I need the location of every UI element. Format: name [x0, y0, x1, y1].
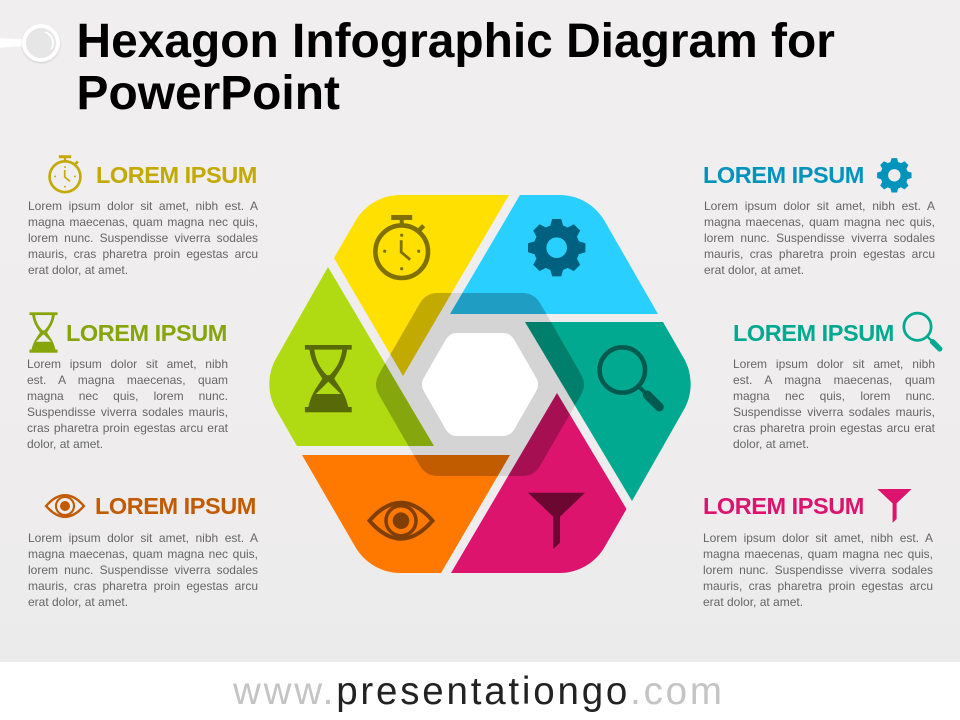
body text: erat dolor, at amet. [704, 263, 804, 277]
heading: LOREM IPSUM [95, 493, 256, 519]
body text: Lorem ipsum dolor sit amet, nibh [27, 357, 228, 371]
body text: dolor, at amet. [733, 437, 809, 451]
centre ring [376, 293, 584, 476]
segment: blue [450, 195, 658, 314]
segment: teal [525, 322, 691, 501]
icon: small magnifying glass [902, 312, 942, 352]
body text: Lorem ipsum dolor sit amet, nibh est. A [28, 531, 258, 545]
icon: small hourglass [29, 312, 58, 353]
icon: small stopwatch [48, 155, 82, 194]
panel: pink text [703, 489, 933, 609]
heading: LOREM IPSUM [703, 493, 864, 519]
heading: LOREM IPSUM [66, 320, 227, 346]
heading: LOREM IPSUM [96, 162, 257, 188]
body text: magna maecenas, quam magna nec quis, [703, 547, 933, 561]
heading: LOREM IPSUM [733, 320, 894, 346]
segment: pink [451, 393, 626, 573]
icon: gear [528, 219, 585, 276]
body text: mauris, cras pharetra proin egestas arcu [703, 579, 933, 593]
body text [27, 357, 228, 451]
title: Hexagon Infographic Diagram for [76, 15, 835, 68]
body text: lorem nunc. Suspendisse viverra sodales [28, 563, 258, 577]
body text: cras pharetra proin egestas arcu erat [733, 421, 935, 435]
footer url: www.presentationgo.com [233, 670, 725, 713]
icon: small funnel [878, 489, 912, 523]
segment: yellow [334, 195, 509, 376]
body text: est. A magna maecenas, quam [733, 373, 935, 387]
body text: Lorem ipsum dolor sit amet, nibh est. A [703, 531, 933, 545]
panel: blue text [703, 158, 935, 277]
body text: dolor, at amet. [27, 437, 103, 451]
body text: Lorem ipsum dolor sit amet, nibh est. A [704, 199, 935, 213]
hexagon diagram [269, 195, 691, 573]
icon: eye [370, 503, 432, 539]
body text: mauris, cras pharetra proin egestas arcu [28, 579, 258, 593]
icon: white pin hook [0, 24, 60, 64]
body text: lorem nunc. Suspendisse viverra sodales [28, 231, 258, 245]
body text: Lorem ipsum dolor sit amet, nibh [733, 357, 935, 371]
body text: magna nec quis, lorem nunc. [27, 389, 228, 403]
body text: magna maecenas, quam magna nec quis, [28, 215, 258, 229]
body text [28, 531, 258, 609]
body text: lorem nunc. Suspendisse viverra sodales [703, 563, 933, 577]
ring overlap shading [376, 293, 584, 476]
body text: est. A magna maecenas, quam [27, 373, 228, 387]
icon: hourglass [305, 345, 352, 412]
icon: funnel [528, 493, 585, 549]
icon: stopwatch [375, 215, 428, 278]
icon: magnifying glass [600, 347, 659, 407]
body text: magna maecenas, quam magna nec quis, [704, 215, 935, 229]
panel: green text [27, 312, 228, 451]
body text [28, 199, 258, 277]
body text: erat dolor, at amet. [28, 263, 128, 277]
footer [0, 662, 960, 720]
centre white hexagon [422, 333, 538, 436]
body text: erat dolor, at amet. [28, 595, 128, 609]
segment: orange [302, 455, 510, 573]
title: PowerPoint [76, 67, 340, 120]
body text [703, 531, 933, 609]
body text: erat dolor, at amet. [703, 595, 803, 609]
panel: yellow text [28, 155, 258, 277]
body text: magna nec quis, lorem nunc. [733, 389, 935, 403]
panel: teal text [733, 312, 942, 451]
icon: small gear [877, 158, 912, 192]
body text: mauris, cras pharetra proin egestas arcu [704, 247, 935, 261]
body text: cras pharetra proin egestas arcu erat [27, 421, 228, 435]
body text: Suspendisse viverra sodales mauris, [27, 405, 228, 419]
heading: LOREM IPSUM [703, 162, 864, 188]
title [76, 15, 835, 120]
icon: small eye [44, 494, 86, 518]
body text: lorem nunc. Suspendisse viverra sodales [704, 231, 935, 245]
body text: Lorem ipsum dolor sit amet, nibh est. A [28, 199, 258, 213]
panel: orange text [28, 493, 258, 609]
body text [733, 357, 935, 451]
body text [704, 199, 935, 277]
body text: Suspendisse viverra sodales mauris, [733, 405, 935, 419]
segment: green [269, 267, 434, 446]
body text: magna maecenas, quam magna nec quis, [28, 547, 258, 561]
body text: mauris, cras pharetra proin egestas arcu [28, 247, 258, 261]
